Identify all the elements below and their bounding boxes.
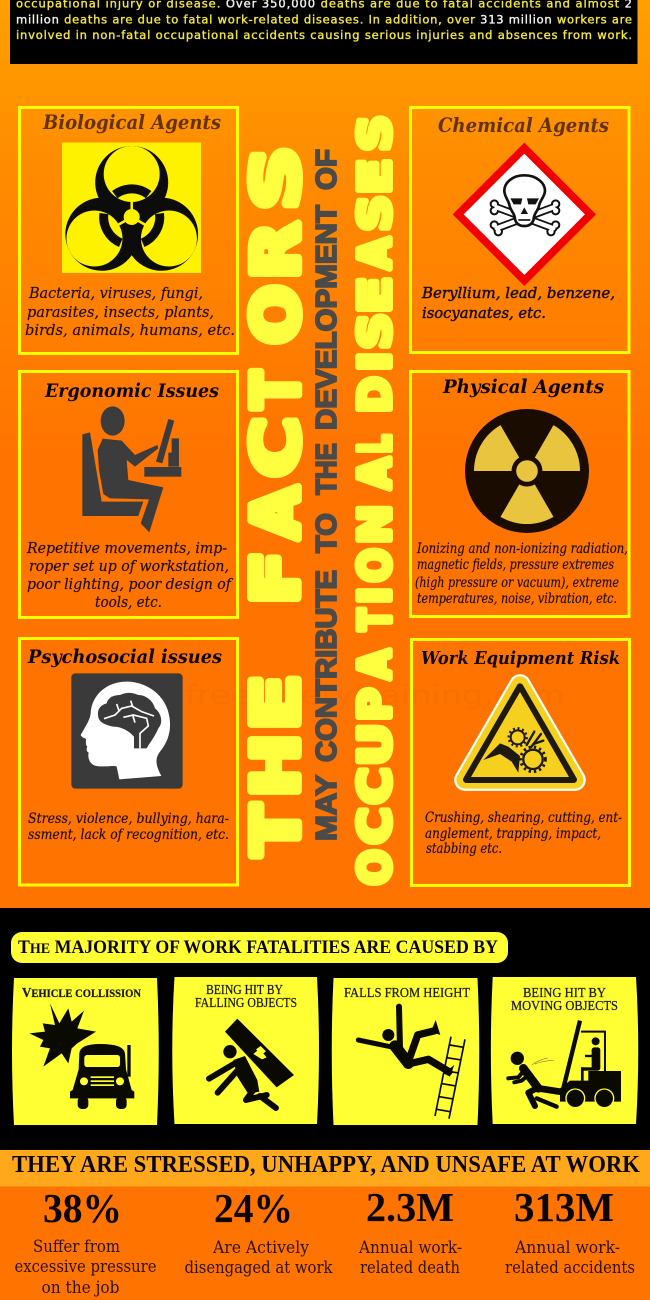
panel: intro text: involved in non-fatal occupational accidents causing serious injuries and absences from work.	[16, 28, 632, 42]
subtitle: may contribute to the development of	[311, 149, 343, 841]
icon: falling person and ladder	[358, 1007, 465, 1119]
card: falling objects: FALLING OBJECTS	[195, 996, 297, 1011]
description: ergonomic issues: Repetitive movements, imp-	[26, 539, 227, 557]
description: biological agents: parasites, insects, plants,	[27, 303, 214, 321]
title: occupational diseases: S	[350, 195, 401, 231]
subtitle: may contribute to the development of: OF	[311, 149, 343, 190]
heading band	[0, 1150, 650, 1186]
description: chemical agents: isocyanates, etc.	[422, 304, 546, 322]
stat: 38 percent: 38%	[43, 1185, 122, 1231]
panel: chemical agents	[410, 108, 629, 352]
description: chemical agents: Beryllium, lead, benzene,	[421, 284, 615, 302]
title: the factors: F	[239, 551, 313, 604]
card: falls from height	[332, 978, 479, 1125]
stat: 24 percent: 24%	[214, 1185, 293, 1231]
stat: 38 percent: on the job	[42, 1278, 120, 1297]
description: physical agents	[415, 541, 628, 607]
title: occupational diseases: P	[350, 688, 401, 721]
card: vehicle collision	[12, 978, 159, 1125]
card: falls from height: FALLS FROM HEIGHT	[344, 986, 470, 1001]
stat: 2.3M: Annual work-	[358, 1238, 462, 1257]
title: the factors: T	[240, 371, 314, 409]
stat: 38 percent: Suffer from	[33, 1237, 120, 1256]
description: work equipment risk: Crushing, shearing, cutting, ent-	[425, 810, 622, 826]
description: biological agents: birds, animals, humans, etc.	[25, 321, 235, 339]
stat: 313M: 313M	[514, 1184, 614, 1230]
panel: stressed unhappy unsafe stats	[0, 1150, 650, 1300]
card: moving objects: BEING HIT BY	[523, 986, 606, 1001]
card: vehicle collision: VEHICLE COLLISSION	[22, 986, 142, 1001]
stat: 38 percent: excessive pressure	[14, 1257, 156, 1276]
title: occupational diseases: C	[350, 768, 401, 804]
heading: psychosocial issues: Psychosocial issues	[27, 646, 222, 668]
title: occupational diseases: S	[350, 115, 401, 151]
heading pill: majority of work fatalities	[11, 932, 508, 963]
panel: biological agents	[20, 108, 238, 354]
stat: 2.3M: related death	[360, 1258, 460, 1277]
description: ergonomic issues	[26, 539, 233, 611]
card: moving objects: MOVING OBJECTS	[511, 999, 618, 1014]
heading pill: majority of work fatalities: THE MAJORITY OF WORK FATALITIES ARE CAUSED BY	[18, 937, 498, 958]
panel: work equipment risk	[412, 640, 630, 886]
panel: psychosocial issues	[20, 638, 238, 885]
heading: work equipment risk: Work Equipment Risk	[421, 648, 620, 669]
description: psychosocial issues: Stress, violence, bullying, hara-	[28, 811, 229, 827]
icon: truck collision	[29, 1003, 134, 1109]
icon: person hit by falling beam	[209, 1019, 294, 1108]
title: occupational diseases: I	[349, 587, 401, 604]
title: the factors	[239, 147, 314, 855]
icon: head with brain	[71, 673, 183, 789]
icon: toxic skull diamond	[453, 143, 596, 286]
description: ergonomic issues: poor lighting, poor design of	[27, 575, 233, 593]
description: chemical agents	[421, 284, 615, 322]
title: occupational diseases: D	[350, 376, 401, 413]
description: work equipment risk: anglement, trapping, impact,	[425, 826, 601, 842]
stat: 24 percent: Are Actively	[212, 1238, 310, 1257]
title: occupational diseases: S	[350, 313, 401, 349]
heading: chemical agents: Chemical Agents	[438, 113, 609, 137]
card: moving objects	[491, 977, 638, 1124]
title: the factors: O	[239, 285, 313, 344]
watermark: freesafetytraining.com	[185, 680, 565, 711]
title: the factors: T	[240, 805, 314, 855]
panel: ergonomic issues	[20, 372, 238, 618]
title: the factors: S	[240, 147, 314, 210]
description: ergonomic issues: tools, etc.	[95, 593, 162, 611]
subtitle: may contribute to the development of: DEVELOPMENT	[311, 204, 343, 430]
title: occupational diseases: N	[349, 505, 401, 544]
icon: forklift hitting person	[508, 1021, 621, 1108]
heading: physical agents: Physical Agents	[442, 376, 604, 398]
title: occupational diseases: E	[350, 159, 401, 194]
title: occupational diseases: T	[350, 608, 401, 631]
description: biological agents	[25, 284, 235, 339]
description: psychosocial issues	[28, 811, 229, 843]
icon: radiation symbol	[465, 409, 589, 533]
stat: 313M	[505, 1184, 635, 1277]
title: occupational diseases: O	[349, 548, 400, 582]
title: occupational diseases: O	[350, 849, 401, 885]
subtitle: may contribute to the development of: THE	[311, 443, 343, 495]
card: falling objects: BEING HIT BY	[206, 983, 283, 998]
title: occupational diseases: C	[350, 808, 401, 844]
title: the factors: R	[240, 222, 314, 279]
description: psychosocial issues: ssment, lack of recognition, etc.	[28, 827, 229, 843]
title: occupational diseases: A	[350, 649, 401, 679]
title: the factors: A	[239, 487, 314, 539]
subtitle: may contribute to the development of: TO	[311, 513, 343, 553]
description: ergonomic issues: roper set up of workstation,	[29, 557, 229, 575]
stat: 24 percent	[184, 1185, 333, 1277]
title: occupational diseases	[349, 115, 401, 885]
panel: physical agents	[410, 372, 629, 616]
description: work equipment risk: stabbing etc.	[426, 841, 502, 857]
panel: intro text	[10, 0, 638, 64]
title: the factors: E	[239, 675, 314, 730]
stat: 38 percent	[14, 1185, 156, 1297]
subtitle: may contribute to the development of: CONTRIBUTE	[311, 570, 343, 762]
panel: intro text: million deaths are due to fatal work-related diseases. In addition, over 313 million workers are	[16, 12, 632, 26]
stat: 313M: related accidents	[505, 1258, 635, 1277]
heading: ergonomic issues: Ergonomic Issues	[44, 380, 219, 402]
title: occupational diseases: A	[351, 457, 401, 489]
card: falling objects	[172, 977, 319, 1124]
stat: 24 percent: disengaged at work	[184, 1258, 333, 1277]
description: biological agents: Bacteria, viruses, fungi,	[28, 284, 203, 302]
title: occupational diseases: L	[349, 435, 401, 454]
subtitle: may contribute to the development of: MAY	[311, 775, 343, 841]
title: occupational diseases: A	[351, 237, 401, 269]
icon: person at workstation	[82, 406, 181, 532]
stat: 2.3M: 2.3M	[366, 1184, 454, 1230]
icon: biohazard	[52, 142, 211, 284]
heading: biological agents: Biological Agents	[42, 110, 221, 134]
stat: 313M: Annual work-	[514, 1238, 620, 1257]
title: occupational diseases: E	[349, 277, 401, 313]
title: the factors: C	[239, 417, 314, 477]
title: occupational diseases: I	[350, 352, 401, 371]
description: work equipment risk	[425, 810, 622, 857]
title: occupational diseases: U	[350, 723, 401, 766]
title: the factors: H	[239, 734, 314, 797]
icon: entanglement warning triangle	[465, 685, 575, 780]
stat: 2.3M	[358, 1184, 462, 1277]
panel: work fatalities	[0, 908, 650, 1150]
